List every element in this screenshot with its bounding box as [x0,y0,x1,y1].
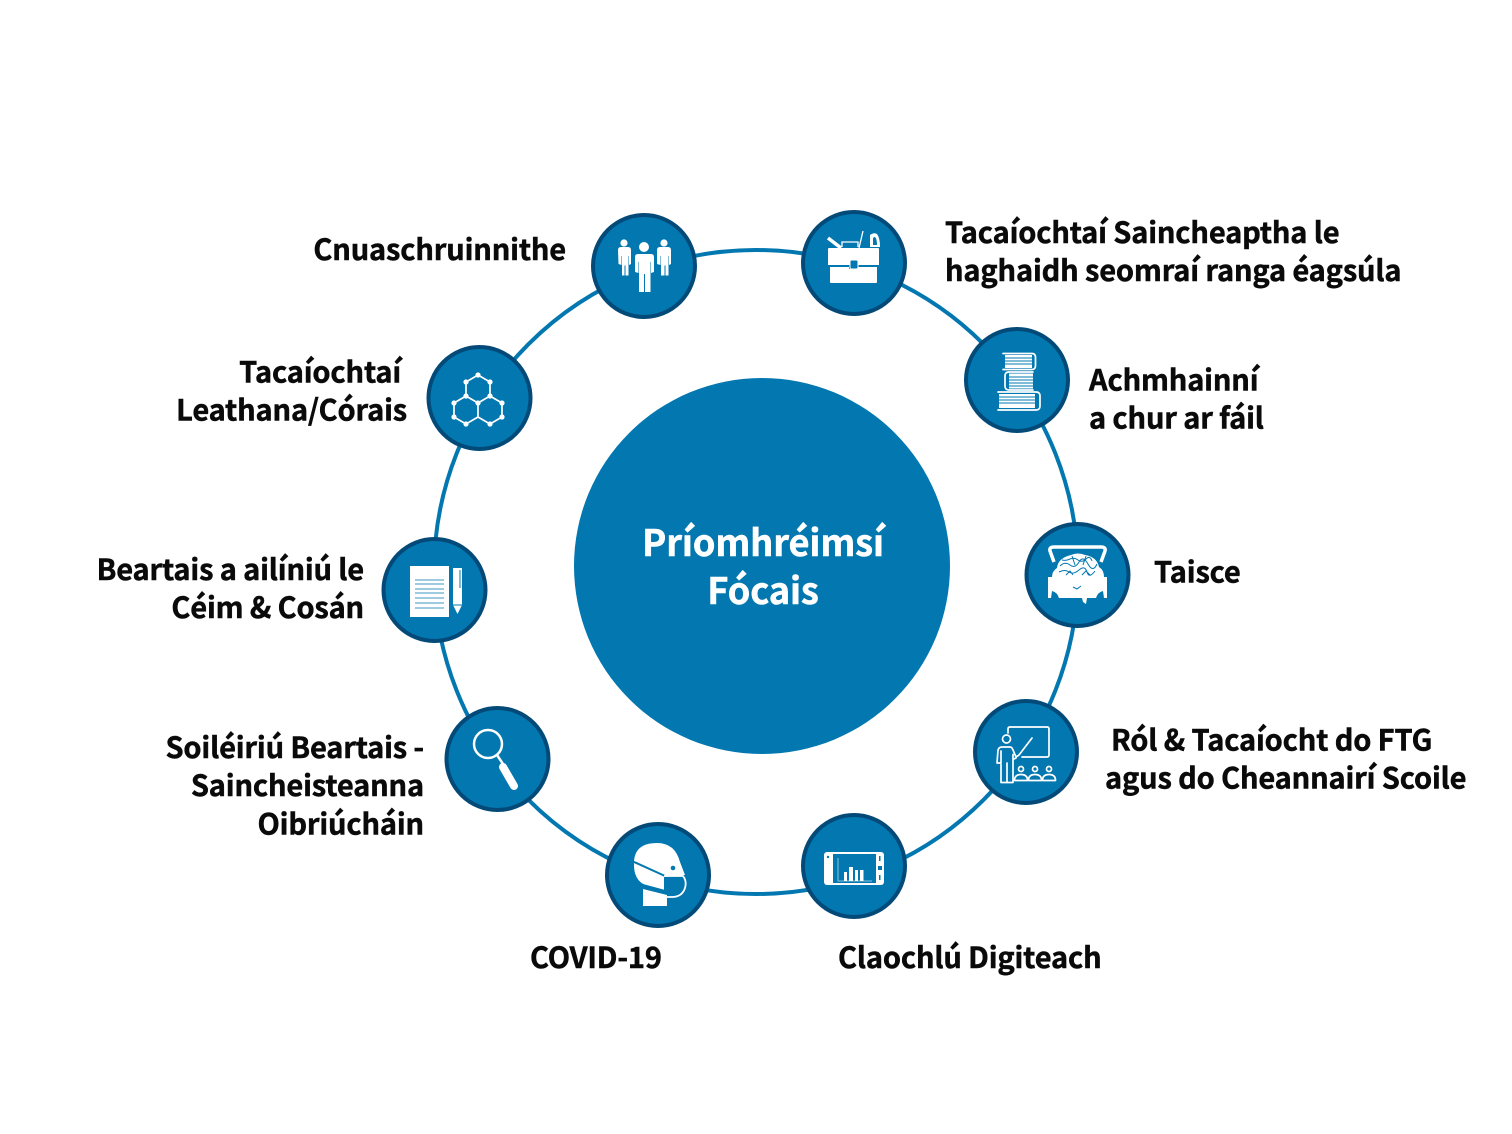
label: Beartais a ailíniú [97,547,364,627]
icon: head with mask [633,843,686,906]
icon: magnifying glass [474,730,514,786]
node: Soiléiriú Beartais [446,708,548,810]
node: COVID-19 [607,824,709,926]
node: Taisce [1026,524,1128,626]
label: classroom supports: Tacaíochtaí Saincheaptha le [945,210,1339,252]
label: Soiléiriú Beartais: Oibriúcháin [258,802,424,844]
label: Cnuaschruinnithe: Cnuaschruinnithe [313,227,566,269]
label: Achmhainní: a chur ar fáil [1089,396,1264,438]
central circle with title: Príomhréimsí [642,515,886,567]
icon: briefcase with tools [828,231,880,283]
label: Soiléiriú Beartais [165,725,424,844]
label: Beartais a ailíniú: Céim & Cosán [171,585,364,627]
label: Ról & Tacaíocht: Ról & Tacaíocht do FTG [1111,718,1432,760]
label: Ról & Tacaíocht: agus do Cheannairí Scoile [1105,756,1466,798]
icon: hexagon network [451,372,505,427]
node: Tacaíochtaí Leathana [428,347,530,449]
label: Achmhainní: Achmhainní [1088,358,1261,400]
node: Ról & Tacaíocht [975,701,1077,803]
central circle with title [574,378,950,754]
icon: treasure chest with brain [1048,547,1107,604]
label: Achmhainní [1088,358,1264,438]
label: Soiléiriú Beartais: Soiléiriú Beartais - [165,725,424,767]
label: Ról & Tacaíocht [1105,718,1466,798]
icon: teacher at board [997,727,1056,782]
node: Beartais a ailíniú [384,539,486,641]
icon: three people [618,239,671,292]
label: Beartais a ailíniú: Beartais a ailíniú le [97,547,364,589]
node: Achmhainní [966,329,1068,431]
icon: tablet with bar chart [824,852,884,885]
ring connecting the focus areas [434,250,1078,894]
node: classroom supports [803,212,905,314]
label: Soiléiriú Beartais: Saincheisteanna [191,763,424,805]
label: Tacaíochtaí Leathana [176,350,407,430]
label: classroom supports: haghaidh seomraí ranga éagsúla [945,248,1401,290]
label: Claochlú Digiteach: Claochlú Digiteach [838,935,1102,977]
label: Tacaíochtaí Leathana: Leathana/Córais [176,388,407,430]
label: classroom supports [945,210,1401,290]
icon: document and pen [410,566,462,617]
label: Taisce: Taisce [1154,550,1241,592]
label: Tacaíochtaí Leathana: Tacaíochtaí [239,350,403,392]
node: Claochlú Digiteach [803,815,905,917]
node: Cnuaschruinnithe [593,215,695,317]
central circle with title: Fócais [707,563,819,615]
icon: stack of books [998,354,1040,410]
label: COVID-19: COVID-19 [530,935,662,977]
